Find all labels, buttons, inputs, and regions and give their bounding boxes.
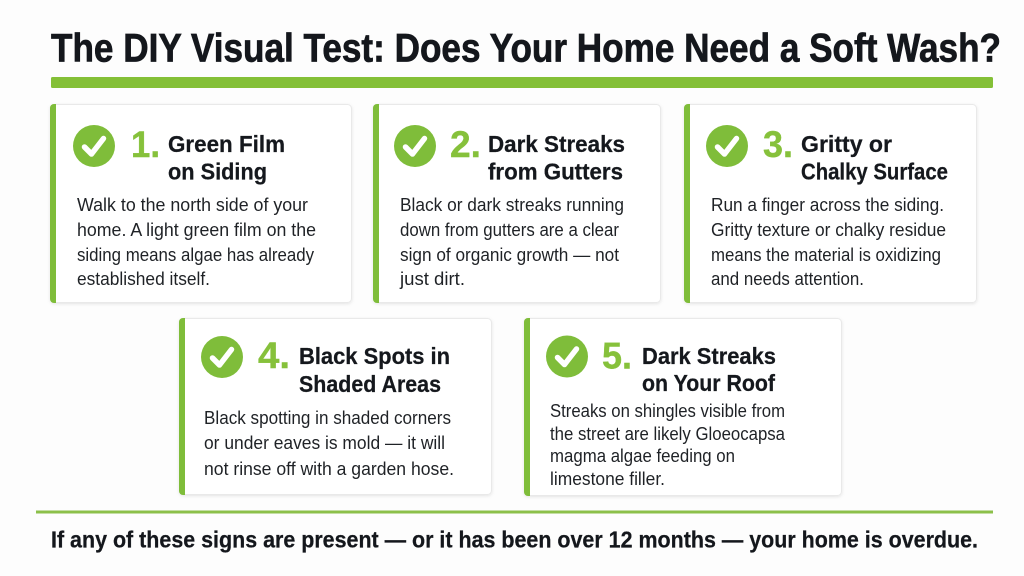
heading 3 — [801, 131, 948, 184]
text block 2 — [399, 195, 624, 289]
text block 4 — [204, 408, 454, 479]
text block 5 — [550, 401, 786, 489]
icon: check 3 — [706, 125, 748, 167]
number 5: 5. — [602, 336, 632, 376]
heading 4: Shaded Areas — [299, 371, 441, 397]
heading 5: Dark Streaks — [642, 343, 776, 369]
heading 3: Chalky Surface — [801, 158, 948, 184]
heading 5 — [642, 343, 776, 396]
heading 1: on Siding — [168, 158, 267, 184]
icon: check 2 — [394, 125, 436, 167]
text block 1: home. A light green film on the — [77, 220, 316, 240]
text block 3 — [711, 195, 946, 289]
number 1: 1. — [131, 124, 160, 165]
text block 3: and needs attention. — [711, 269, 864, 289]
text block 2: sign of organic growth — not — [400, 245, 619, 265]
heading 4: Black Spots in — [299, 343, 450, 369]
panel: card 3 gritty or chalky surface — [684, 104, 976, 303]
number 2: 2. — [450, 124, 481, 165]
text block 3: Gritty texture or chalky residue — [711, 220, 946, 240]
panel: card 4 black spots — [179, 318, 492, 495]
text block 1: established itself. — [77, 269, 210, 289]
text block 3: means the material is oxidizing — [711, 245, 941, 265]
title underline bar — [51, 77, 993, 88]
heading 4 — [299, 343, 450, 397]
text block 5: limestone filler. — [550, 469, 665, 489]
text block 5: magma algae feeding on — [550, 446, 735, 466]
heading 2 — [488, 131, 625, 184]
text block 4: or under eaves is mold — it will — [204, 433, 445, 453]
heading 2: Dark Streaks — [488, 131, 625, 157]
text block 2: Black or dark streaks running — [400, 195, 624, 215]
number 3: 3. — [763, 124, 793, 165]
heading 1 — [168, 131, 285, 184]
heading 2: from Gutters — [488, 158, 623, 184]
text block 5: the street are likely Gloeocapsa — [550, 424, 786, 444]
footer divider — [36, 510, 993, 514]
panel: card 1 green film — [50, 104, 352, 303]
number 4: 4. — [258, 335, 290, 376]
heading 1: Green Film — [168, 131, 285, 157]
text block 2: just dirt. — [399, 269, 465, 289]
footer callout: If any of these signs are present — or it has been over 12 months — your home is overdue. — [51, 526, 978, 552]
text block 3: Run a finger across the siding. — [711, 195, 944, 215]
text block 2: down from gutters are a clear — [400, 220, 619, 240]
panel: card 2 dark streaks from gutters — [373, 104, 660, 303]
text block 1: Walk to the north side of your — [77, 195, 308, 215]
text block 1: siding means algae has already — [77, 245, 314, 265]
text block 5: Streaks on shingles visible from — [550, 401, 785, 421]
text block 1 — [77, 195, 316, 289]
text block 4: Black spotting in shaded corners — [204, 408, 451, 428]
panel: card 5 dark streaks on roof — [524, 318, 842, 496]
icon: check 1 — [73, 125, 115, 167]
text block 4: not rinse off with a garden hose. — [204, 459, 454, 479]
icon: check 5 — [546, 336, 588, 378]
heading 5: on Your Roof — [642, 370, 775, 396]
icon: check 4 — [201, 336, 243, 378]
heading 3: Gritty or — [801, 131, 892, 157]
